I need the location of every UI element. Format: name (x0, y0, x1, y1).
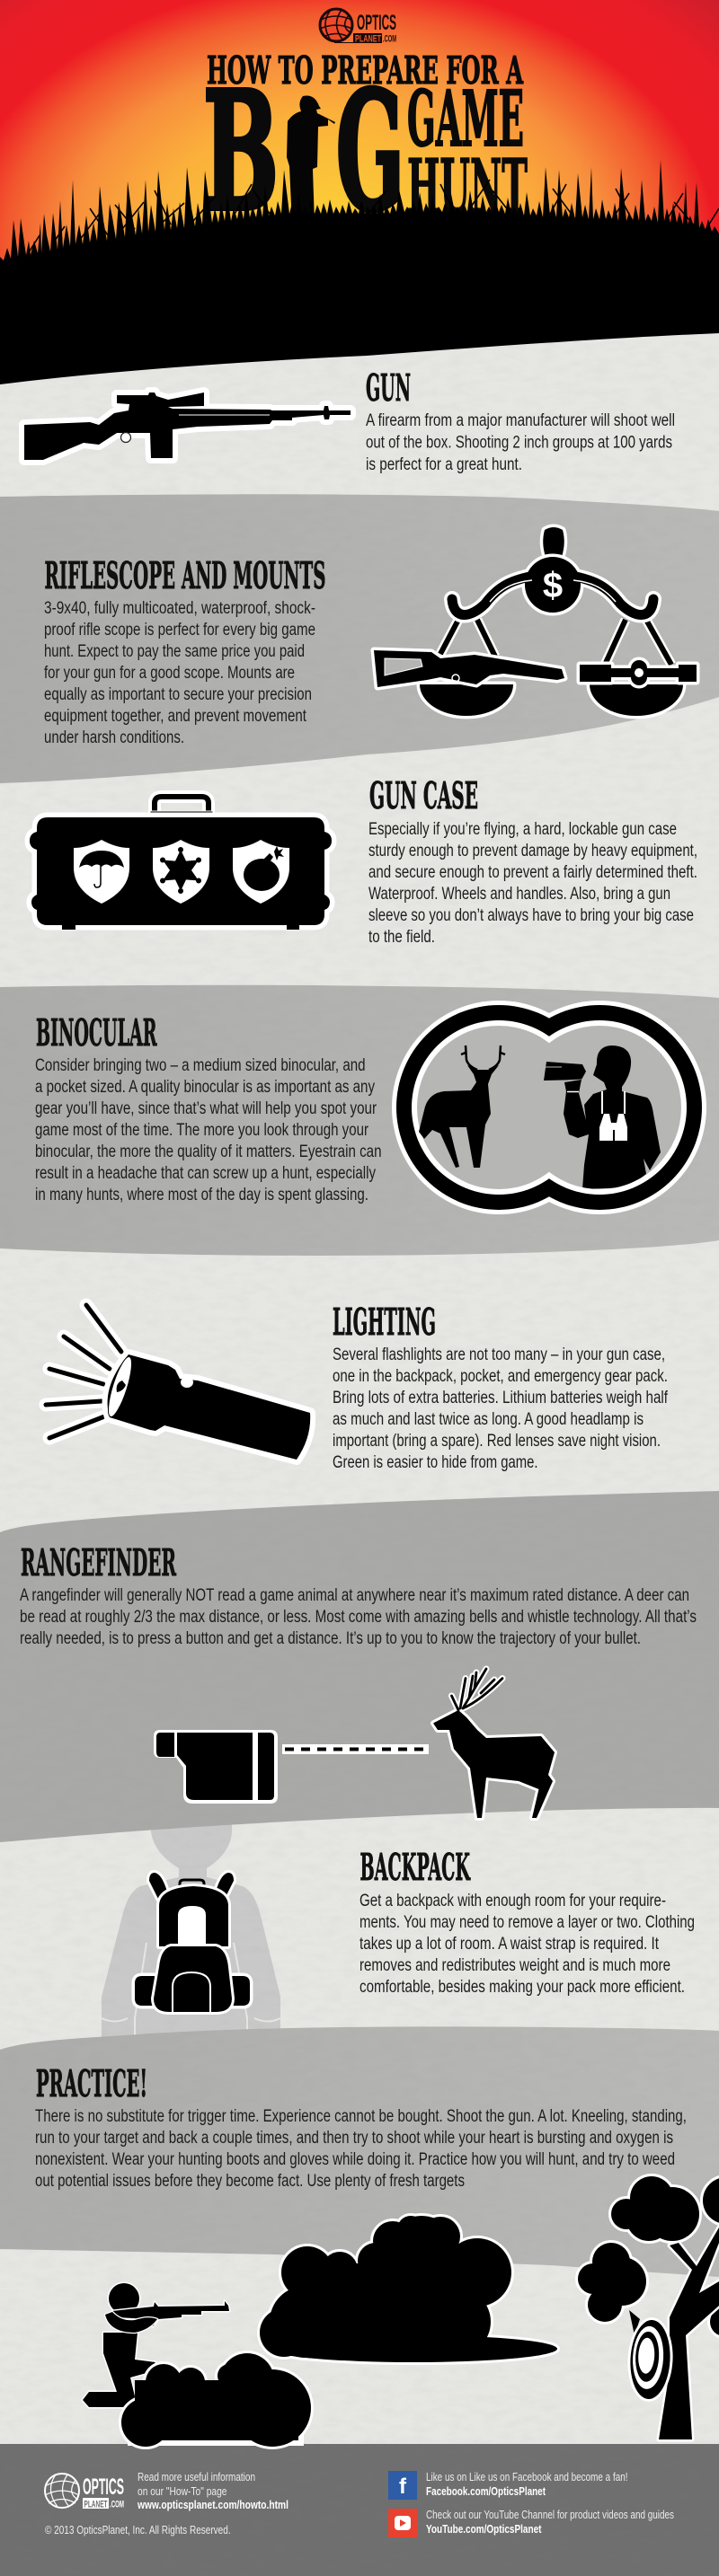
logo: OpticsPlanet (320, 9, 396, 45)
logo: OpticsPlanet: PLANET (355, 34, 381, 45)
infographic canvas: OPTICS (357, 11, 396, 35)
footer text: how-to link: Read more useful information (138, 2470, 255, 2483)
text: rangefinder (20, 1586, 697, 1648)
footer background (0, 2444, 719, 2576)
section: rangefinder (20, 1541, 697, 1818)
badge: bomb shield (233, 840, 289, 904)
section: riflescope and mounts (44, 527, 697, 747)
section: backpack: BACKPACK (360, 1846, 471, 1889)
section: binocular (35, 1001, 706, 1214)
text: binocular: game most of the time. The more you look through your (35, 1121, 369, 1140)
icon: backpack (135, 1873, 250, 2012)
text: backpack (360, 1892, 695, 1997)
footer logo: .COM (110, 2499, 124, 2510)
text: binocular: result in a headache that can screw up a hunt, especially (35, 1164, 376, 1183)
icon: kneeling shooter (83, 2283, 229, 2407)
icon: small bush (121, 2353, 311, 2447)
band: practice background (0, 2026, 719, 2277)
text: binocular: binocular, the more the quality of it matters. Eyestrain can (35, 1142, 381, 1161)
section: gun (24, 366, 675, 474)
band: rangefinder background (0, 1491, 719, 1842)
section: practice (35, 2062, 719, 2447)
text: riflescope: proof rifle scope is perfect for every big game (44, 621, 315, 640)
arrow: dashed range line (282, 1744, 429, 1754)
text: lighting: Green is easier to hide from game. (333, 1453, 537, 1472)
icon: youtube (388, 2509, 417, 2537)
footer logo (45, 2474, 124, 2510)
icon: facebook: f (399, 2475, 407, 2499)
badge: sheriff star shield (153, 840, 209, 904)
text: binocular: a pocket sized. A quality binocular is as important as any (35, 1078, 375, 1097)
icon: flashlight (46, 1305, 310, 1460)
section: lighting (46, 1301, 669, 1472)
footer text: how-to link: on our "How-To" page (138, 2484, 226, 2498)
icon: balance scale with rifle and scope: $ (543, 566, 563, 605)
section: gun: GUN (366, 366, 411, 410)
footer text: facebook (426, 2470, 627, 2498)
icon: rifle (24, 393, 351, 460)
footer text: youtube: YouTube.com/OpticsPlanet (426, 2522, 542, 2536)
section: riflescope and mounts: RIFLESCOPE AND MOUNTS (45, 554, 325, 597)
section: rangefinder: RANGEFINDER (21, 1541, 176, 1584)
target (626, 2316, 675, 2403)
text: gun (366, 411, 675, 474)
section: lighting: LIGHTING (333, 1301, 436, 1344)
badge: umbrella shield (74, 840, 129, 904)
icon: binocular view of deer and hunter (392, 1001, 706, 1214)
title (203, 49, 528, 247)
black grassy hill (0, 160, 719, 384)
text: riflescope (44, 599, 315, 747)
text: gun case: to the field. (368, 928, 435, 947)
text: binocular (35, 1056, 381, 1204)
deer in view (419, 1045, 505, 1168)
footer text: how-to link: www.opticsplanet.com/howto.html (137, 2498, 288, 2511)
text: riflescope: equally as important to secure your precision (44, 685, 312, 704)
text: riflescope: 3-9x40, fully multicoated, waterproof, shock- (44, 599, 315, 618)
text: binocular: in many hunts, where most of the day is spent glassing. (35, 1186, 368, 1204)
section: practice: PRACTICE! (36, 2062, 147, 2105)
footer text: facebook: Like us on Like us on Facebook and become a fan! (426, 2470, 627, 2483)
icon: rangefinder (154, 1730, 278, 1804)
title: G (336, 56, 404, 247)
footer text: copyright: © 2013 OpticsPlanet, Inc. All Rights Reserved. (45, 2523, 231, 2536)
text: practice: out potential issues before they become fact. Use plenty of fresh targets (35, 2172, 465, 2191)
hunter with binoculars in view (544, 1045, 661, 1189)
icon: tree with target (578, 2176, 719, 2439)
header sunset sky (0, 0, 719, 269)
text: riflescope: for your gun for a good scope. Mounts are (44, 664, 295, 683)
icon: balance scale with rifle and scope (374, 527, 697, 716)
footer (45, 2470, 674, 2537)
text: binocular: Consider bringing two – a medium sized binocular, and (35, 1056, 366, 1075)
band: riflescope background (0, 494, 719, 783)
icon: large bush (260, 2216, 557, 2362)
infographic canvas: GAME (407, 75, 524, 164)
section: binocular: BINOCULAR (36, 1011, 157, 1054)
text: riflescope: equipment together, and prevent movement (44, 707, 307, 726)
section: gun case: GUN CASE (369, 774, 478, 817)
footer text: how-to link (137, 2470, 288, 2511)
footer: OPTICS (83, 2475, 124, 2500)
band: binocular background (0, 985, 719, 1256)
section: backpack (135, 1846, 695, 2012)
footer logo: PLANET (84, 2499, 108, 2510)
text: riflescope: hunt. Expect to pay the same price you paid (44, 642, 305, 661)
footer text: youtube (426, 2508, 674, 2536)
section: gun case (30, 774, 697, 947)
text: gun: is perfect for a great hunt. (366, 455, 522, 474)
icon: facebook (388, 2471, 417, 2500)
text: riflescope: under harsh conditions. (44, 728, 184, 747)
text: binocular: gear you’ll have, since that’s what will help you spot your (35, 1099, 377, 1118)
title letter: B: B (203, 56, 279, 247)
footer text: facebook: Facebook.com/OpticsPlanet (426, 2484, 546, 2498)
hunter silhouette (287, 95, 335, 225)
infographic canvas: HUNT (407, 143, 528, 231)
text: lighting (333, 1345, 669, 1472)
icon: gun case (30, 797, 332, 930)
text: gun case (368, 820, 697, 947)
text: lighting: as much and last twice as long. A good headlamp is (333, 1410, 644, 1429)
silhouette: person wearing backpack (102, 1823, 280, 2043)
icon: stag (433, 1669, 555, 1818)
logo: OpticsPlanet: .COM (383, 34, 396, 45)
text: practice (35, 2107, 687, 2191)
